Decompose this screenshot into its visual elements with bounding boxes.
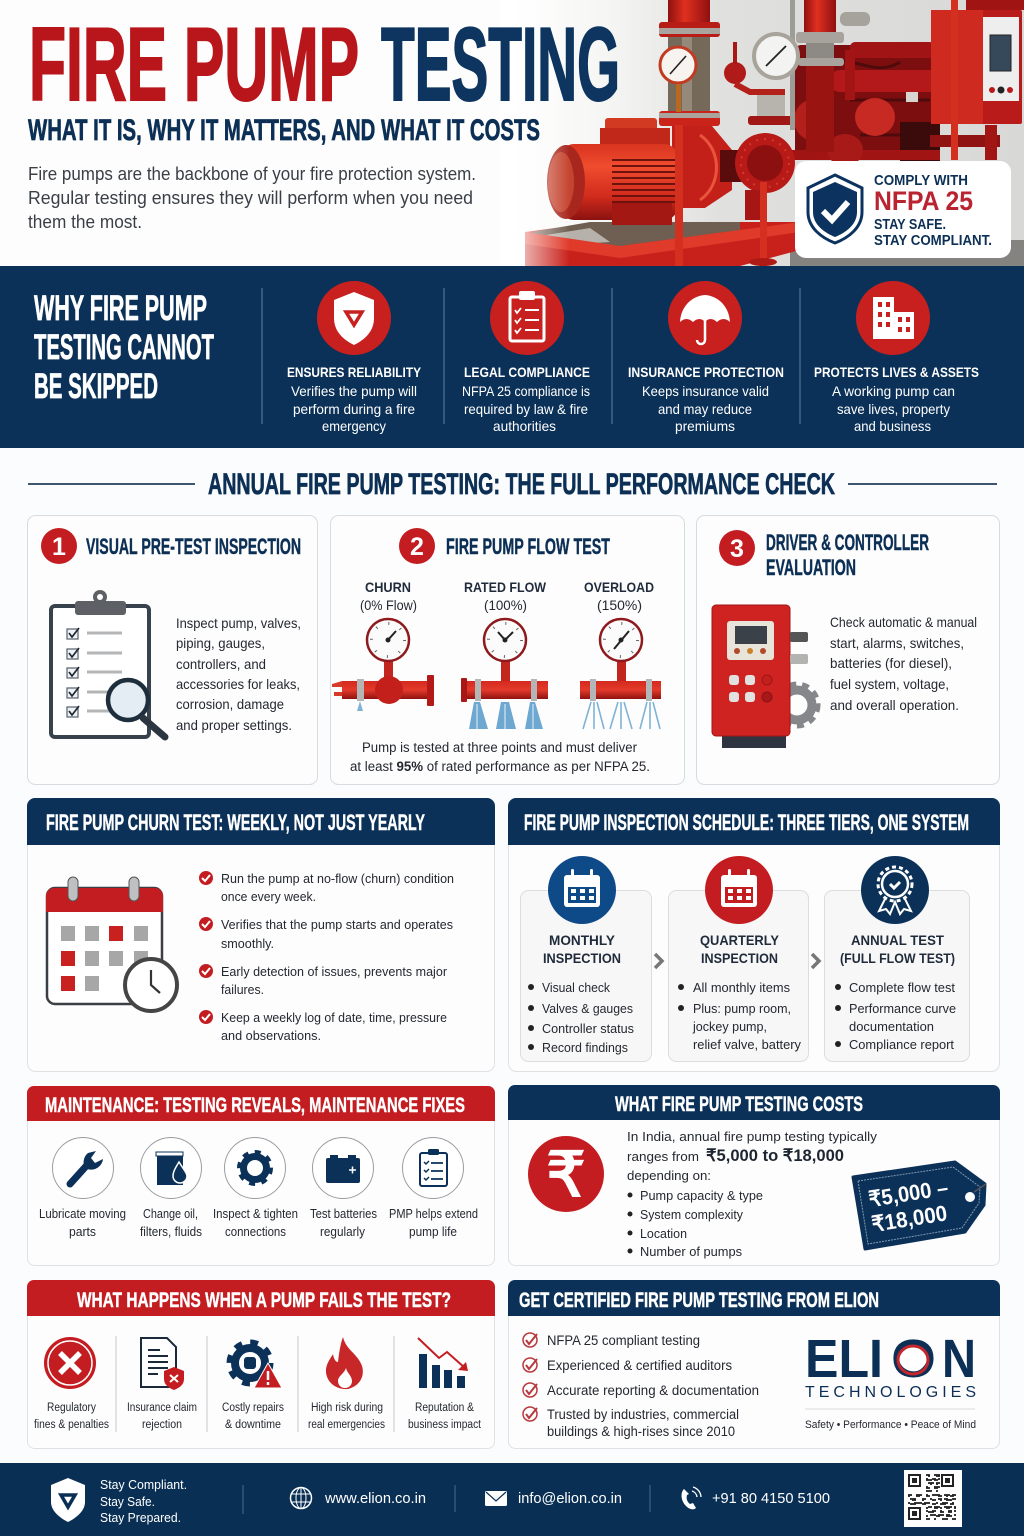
panel: maintenance [27,1086,495,1266]
tier: monthly: Visual check [542,980,610,995]
logo: Elion Technologies: O [891,1329,936,1389]
intro paragraph: Fire pumps are the backbone of your fire protection system. [28,164,476,184]
icon: rupee coin: ₹ [546,1141,586,1210]
tier: quarterly [668,856,808,1062]
heading [766,530,929,580]
checklist: once every week. [221,889,316,904]
phone: +91 80 4150 5100 [712,1490,830,1507]
email: info@elion.co.in [518,1490,622,1507]
item: protects lives and assets: save lives, property [837,401,950,417]
item: test batteries: Test batteries [310,1207,377,1221]
description: piping, gauges, [176,635,265,651]
checklist: buildings & high-rises since 2010 [547,1424,735,1439]
second riser [748,0,844,152]
logo: Elion Technologies: Safety • Performance • Peace of Mind [805,1419,976,1431]
description [830,614,977,713]
footer shield and tagline: Stay Safe. [100,1494,155,1509]
arrow: monthly to quarterly [655,954,662,968]
item: change oil [140,1138,202,1239]
flow point: churn [332,579,434,711]
header background [0,0,1024,266]
panel: get certified testing [508,1280,1000,1448]
cost text: ranges from [627,1149,699,1164]
checklist: Trusted by industries, commercial [547,1407,739,1422]
cost text: Location [640,1226,687,1241]
number badge 3 [719,530,755,566]
item: high risk flame [308,1337,385,1431]
item: costly repairs [222,1342,284,1431]
checklist: Keep a weekly log of date, time, pressure [221,1010,447,1025]
gauge two [754,12,870,78]
panel: what happens when a pump fails: WHAT HAPPENS WHEN A PUMP FAILS THE TEST? [77,1288,451,1312]
item: lubricate [39,1138,126,1239]
item: legal compliance: authorities [493,418,556,434]
logo: Elion Technologies: N [942,1329,976,1389]
icon: calendar and clock [46,877,177,1011]
item: lubricate: parts [69,1225,96,1239]
phone [682,1487,830,1509]
item: insurance protection [628,281,784,434]
control panel cabinet [931,0,1024,160]
icon: rupee coin [528,1136,604,1212]
item: ensures reliability [287,281,422,434]
flow point: churn: (0% Flow) [360,597,417,613]
panel: fire pump flow test: FIRE PUMP FLOW TEST [446,534,610,559]
item: reputation chart: Reputation & [415,1402,474,1414]
tier: quarterly: jockey pump, [692,1019,767,1034]
relief valve [724,42,785,92]
callout: NFPA 25 badge: NFPA 25 [874,186,973,216]
tier: quarterly: INSPECTION [701,950,778,966]
description: Inspect pump, valves, [176,615,301,631]
heading: BE SKIPPED [34,367,158,406]
checklist: Verifies that the pump starts and operates [221,917,453,932]
volutes [672,126,795,220]
flow point: churn: CHURN [365,579,411,595]
heading: WHY FIRE PUMP [34,289,207,328]
number badge 1 [41,528,77,564]
checklist: NFPA 25 compliant testing [547,1333,700,1348]
item: legal compliance [462,281,590,434]
item: insurance claim rejection: rejection [142,1419,182,1431]
description: accessories for leaks, [176,676,300,692]
checklist: Accurate reporting & documentation [547,1383,759,1398]
item: fines [34,1338,109,1431]
tier: monthly: INSPECTION [543,950,621,966]
item: test batteries: regularly [320,1225,366,1239]
cost text [627,1129,878,1259]
panel: visual pre-test inspection [28,516,318,784]
caption: at least 95% of rated performance as per NFPA 25. [350,759,650,774]
cost text: depending on: [627,1168,711,1183]
item: legal compliance: NFPA 25 compliance is [462,383,590,399]
panel: testing costs [508,1085,1000,1266]
title: TESTING [381,7,620,123]
heading: EVALUATION [766,555,856,580]
item: insurance protection: premiums [675,418,735,434]
tier: quarterly: All monthly items [693,980,790,995]
item: reputation chart: business impact [408,1419,482,1431]
description: start, alarms, switches, [830,635,964,651]
tier: annual: documentation [849,1019,934,1034]
description: and overall operation. [830,697,959,713]
base skid [525,222,800,266]
panel: testing costs: WHAT FIRE PUMP TESTING COSTS [615,1092,863,1116]
item: insurance protection: Keeps insurance valid [642,383,769,399]
subtitle: WHAT IT IS, WHY IT MATTERS, AND WHAT IT COSTS [28,114,540,147]
flow point: rated flow: (100%) [484,597,527,613]
item: inspect connections [213,1138,298,1239]
tier: annual: ANNUAL TEST [851,932,944,948]
panel: driver and controller evaluation [696,516,1000,784]
item: test batteries [310,1138,377,1239]
pump room photo illustration [500,0,1024,266]
checklist: Run the pump at no-flow (churn) condition [221,871,454,886]
description: fuel system, voltage, [830,676,949,692]
cost text: ₹5,000 to ₹18,000 [706,1146,844,1165]
flow point: rated flow [461,579,548,729]
gauge one [660,47,696,112]
heading: TESTING CANNOT [34,328,214,367]
tier: annual [824,856,970,1062]
item: change oil: Change oil, [143,1207,198,1221]
tier: quarterly: relief valve, battery [693,1037,801,1052]
item: protects lives and assets: and business [854,418,931,434]
tier: monthly: Controller status [542,1021,634,1036]
intro paragraph [28,164,476,232]
website [290,1487,426,1509]
footer shield and tagline: Stay Prepared. [100,1510,181,1525]
number badge 2 [399,528,435,564]
item: fines: Regulatory [47,1402,96,1414]
description: corrosion, damage [176,696,284,712]
description [176,615,301,733]
tier: monthly: Valves & gauges [542,1001,633,1016]
price tag: ₹5,000 – [867,1175,950,1212]
icon: clipboard with magnifier [51,590,165,737]
callout: NFPA 25 badge [795,161,1011,258]
checklist [523,1333,759,1439]
item: protects lives and assets: PROTECTS LIVES & ASSETS [814,364,979,380]
checklist: Experienced & certified auditors [547,1358,732,1373]
tier: quarterly: Plus: pump room, [693,1001,791,1016]
item: costly repairs: & downtime [225,1419,281,1431]
item: insurance claim rejection [127,1338,197,1431]
callout: NFPA 25 badge: COMPLY WITH [874,172,968,189]
tier: annual: Performance curve [849,1001,956,1016]
first riser [659,0,720,126]
cost text: Pump capacity & type [640,1188,763,1203]
item: insurance protection: INSURANCE PROTECTION [628,364,784,380]
QR code [904,1470,962,1527]
callout: NFPA 25 badge: STAY SAFE. [874,217,946,233]
footer shield and tagline: Stay Compliant. [100,1477,187,1492]
logo: Elion Technologies: TECHNOLOGIES [805,1384,976,1401]
panel: what happens when a pump fails [27,1280,495,1448]
item: legal compliance: required by law & fire [464,401,588,417]
tier: annual: Compliance report [849,1037,954,1052]
heading [34,289,214,406]
flow point: rated flow: RATED FLOW [464,579,547,595]
item: inspect connections: Inspect & tighten [213,1207,298,1221]
motor [547,118,678,225]
tier: monthly: MONTHLY [549,932,616,948]
item: protects lives and assets [814,281,979,434]
number badge 3: 3 [730,535,744,563]
item: costly repairs: Costly repairs [222,1402,284,1414]
tier: monthly: Record findings [542,1040,628,1055]
description: batteries (for diesel), [830,655,952,671]
item: insurance protection: and may reduce [658,401,752,417]
item: protects lives and assets: A working pump can [832,383,955,399]
arrow: quarterly to annual [812,954,819,968]
number badge 1: 1 [52,533,66,561]
item: insurance claim rejection: Insurance claim [127,1402,197,1414]
price tag [853,1162,986,1249]
intro paragraph: them the most. [28,212,142,232]
item: ensures reliability: emergency [322,418,386,434]
checklist: failures. [221,982,264,997]
panel: fire pump flow test [330,516,684,784]
checklist: Early detection of issues, prevents major [221,964,448,979]
item: ensures reliability: Verifies the pump will [291,383,417,399]
panel: inspection schedule [508,798,1000,1072]
panel: visual pre-test inspection: VISUAL PRE-TEST INSPECTION [86,534,301,559]
engine [790,42,1000,166]
price tag: ₹18,000 [870,1200,949,1237]
panel: churn test [27,798,495,1072]
item: PMP: PMP helps extend [389,1207,478,1221]
title: FIRE PUMP [29,7,359,123]
website: www.elion.co.in [324,1490,426,1507]
number badge 2: 2 [410,533,424,561]
item: lubricate: Lubricate moving [39,1207,126,1221]
checklist: and observations. [221,1028,321,1043]
intro paragraph: Regular testing ensures they will perform when you need [28,188,473,208]
logo: Elion Technologies [805,1329,976,1431]
item: PMP [389,1138,478,1239]
cost text: In India, annual fire pump testing typically [627,1129,878,1144]
logo: Elion Technologies: ELI [805,1329,883,1389]
icon: controller cabinet [712,605,818,748]
item: reputation chart [408,1338,482,1431]
cost text: Number of pumps [640,1244,742,1259]
flow point: overload: OVERLOAD [584,579,654,595]
caption [350,740,650,774]
icon: shield check [808,175,862,243]
caption: Pump is tested at three points and must deliver [362,740,637,755]
tier: quarterly: QUARTERLY [700,932,780,948]
callout: NFPA 25 badge: STAY COMPLIANT. [874,233,992,249]
checklist: smoothly. [221,936,274,951]
panel: why testing cannot be skipped [0,266,1024,448]
item: high risk flame: High risk during [311,1402,383,1414]
item: PMP: pump life [409,1225,457,1239]
item: high risk flame: real emergencies [308,1419,385,1431]
tier: annual: (FULL FLOW TEST) [840,950,955,966]
panel: churn test: FIRE PUMP CHURN TEST: WEEKLY, NOT JUST YEARLY [46,810,425,835]
thin red pipes [675,125,777,266]
footer [0,1463,1024,1536]
tier: annual: Complete flow test [849,980,955,995]
footer shield and tagline [51,1477,187,1525]
description: and proper settings. [176,717,292,733]
tier: monthly [520,856,652,1062]
item: inspect connections: connections [225,1225,286,1239]
item: legal compliance: LEGAL COMPLIANCE [464,364,590,380]
description: controllers, and [176,656,266,672]
panel: maintenance: MAINTENANCE: TESTING REVEALS, MAINTENANCE FIXES [45,1093,465,1117]
checklist [199,871,454,1043]
description: Check automatic & manual [830,614,977,630]
item: ensures reliability: ENSURES RELIABILITY [287,364,422,380]
flow point: overload: (150%) [597,597,642,613]
item: ensures reliability: perform during a fire [293,401,415,417]
cost text: System complexity [640,1207,743,1222]
item: change oil: filters, fluids [140,1225,202,1239]
item: fines: fines & penalties [34,1419,109,1431]
flow point: overload [580,579,661,729]
